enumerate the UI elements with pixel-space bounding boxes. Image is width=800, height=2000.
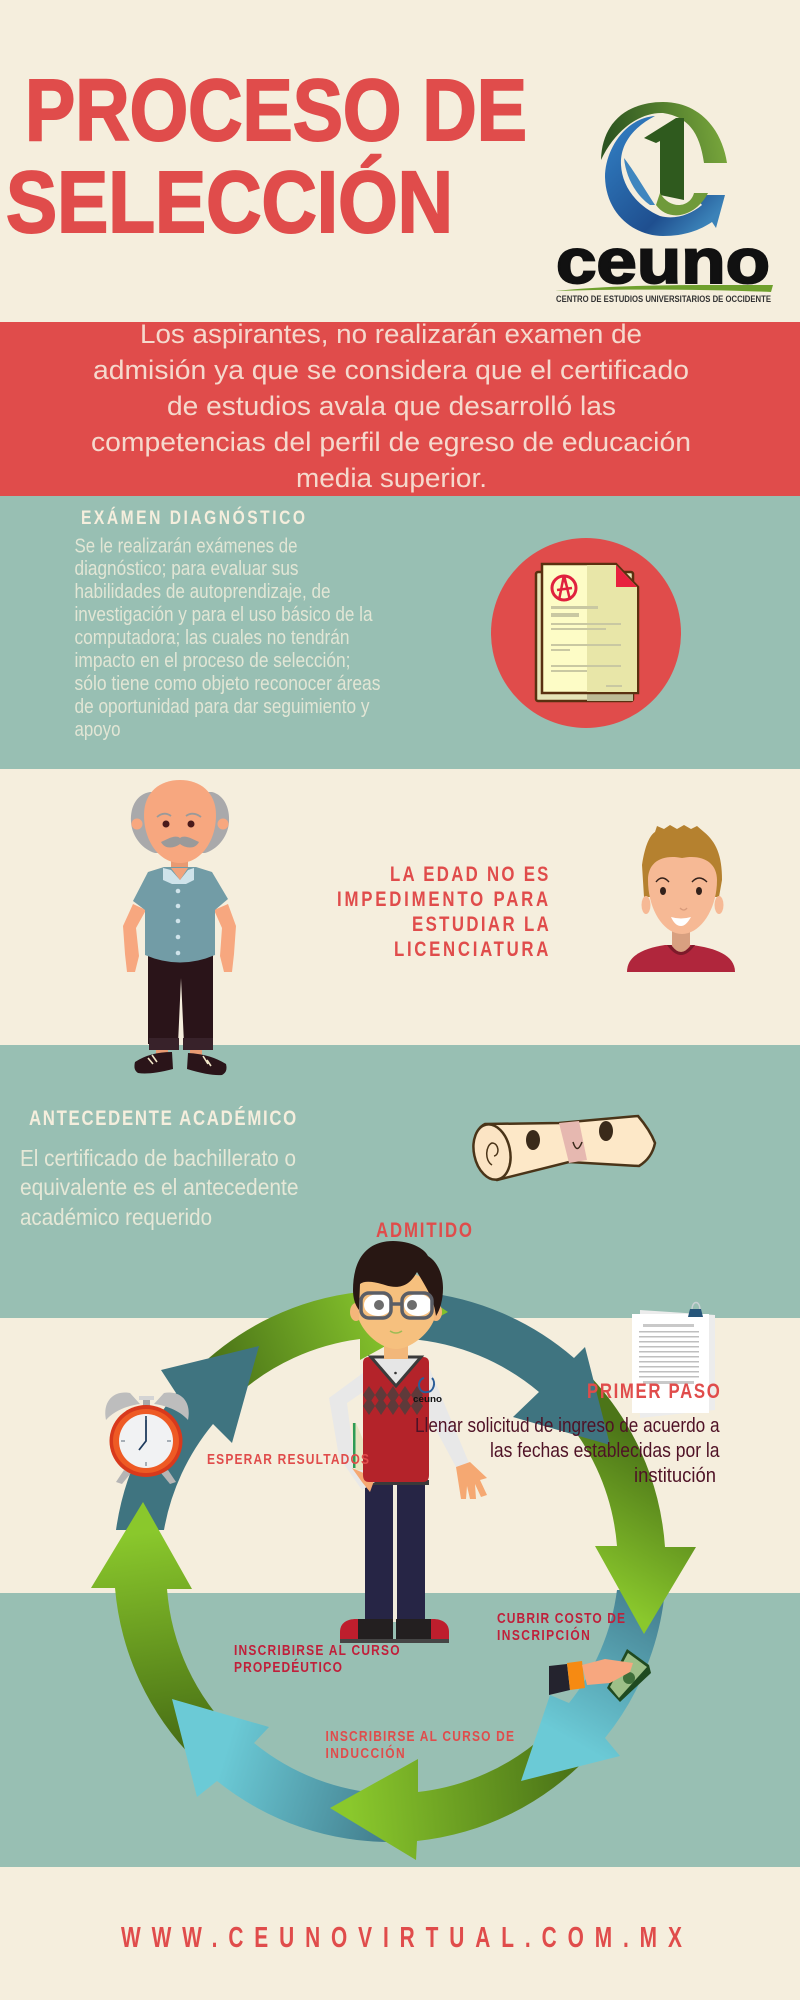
arrow: propaedeutic course [91, 1502, 235, 1760]
panel: intro band [0, 322, 800, 496]
intro text: competencias del perfil de egreso de educación [91, 427, 691, 457]
label: curso de induccion: INSCRIBIRSE AL CURSO DE [326, 1728, 514, 1744]
text: academic description: académico requerido [20, 1204, 212, 1230]
arrow: first step [410, 1292, 610, 1445]
icon: alarm clock [105, 1392, 189, 1484]
icon: diploma scroll [469, 1116, 655, 1183]
intro text [91, 319, 691, 493]
text: age statement: ESTUDIAR LA [412, 913, 549, 937]
text: academic description: El certificado de bachillerato o [20, 1145, 296, 1171]
label: curso de induccion: INDUCCIÓN [326, 1745, 405, 1761]
arrow: after first step [550, 1371, 696, 1634]
icon: ceuno logo: ceuno [556, 227, 770, 297]
text: diagnostic description: computadora; las cuales no tendrán [74, 627, 350, 649]
heading: admitido: ADMITIDO [376, 1219, 472, 1243]
label: esperar resultados: ESPERAR RESULTADOS [207, 1451, 369, 1467]
label: curso propedeutico: INSCRIBIRSE AL CURSO [234, 1642, 400, 1658]
text: diagnostic description [74, 536, 380, 741]
panel: diagnostic exam band [0, 496, 800, 769]
icon: application papers [632, 1302, 715, 1418]
text: diagnostic description: investigación y para el uso básico de la [74, 604, 373, 626]
heading: antecedente academico: ANTECEDENTE ACADÉMICO [29, 1106, 296, 1131]
heading: examen diagnostico: EXÁMEN DIAGNÓSTICO [81, 505, 305, 528]
text: diagnostic description: de oportunidad para dar seguimiento y [74, 696, 370, 718]
intro text: admisión ya que se considera que el certificado [93, 355, 689, 385]
heading: primer paso: PRIMER PASO [587, 1380, 720, 1404]
illustration: admitted student: ceuno [413, 1394, 443, 1404]
text: diagnostic description: impacto en el proceso de selección; [74, 650, 350, 672]
footer website: WWW.CEUNOVIRTUAL.COM.MX [121, 1922, 682, 1954]
arrow: results to admitted [195, 1266, 448, 1396]
intro text: media superior. [296, 463, 487, 493]
label: cubrir costo: CUBRIR COSTO DE [497, 1610, 625, 1626]
intro text: de estudios avala que desarrolló las [167, 391, 616, 421]
text: first step description [415, 1415, 720, 1487]
panel: age band [0, 769, 800, 1045]
label: cubrir costo: INSCRIPCIÓN [497, 1627, 590, 1643]
chart: process cycle arrows [91, 1266, 696, 1860]
text: diagnostic description: diagnóstico; para evaluar sus [74, 558, 298, 580]
text: diagnostic description: sólo tiene como objeto reconocer áreas [74, 673, 380, 695]
arrow: induction course [172, 1699, 395, 1842]
text: academic description: equivalente es el antecedente [20, 1174, 298, 1200]
illustration: young man [627, 825, 735, 972]
text: first step description: institución [634, 1465, 716, 1487]
panel: cycle lower band [0, 1593, 800, 1867]
label: curso de induccion [326, 1728, 514, 1761]
text: age statement: LICENCIATURA [394, 938, 549, 962]
icon: exam documents in circle [491, 538, 681, 728]
text: first step description: Llenar solicitud de ingreso de acuerdo a [415, 1415, 720, 1437]
title: PROCESO DE [25, 62, 527, 159]
text: age statement: LA EDAD NO ES [390, 863, 548, 887]
illustration: admitted student [329, 1241, 487, 1643]
title [6, 62, 527, 251]
arrow: green tip [430, 1300, 448, 1322]
title: SELECCIÓN [6, 154, 453, 251]
icon: ceuno logo [555, 102, 773, 304]
panel: cycle upper band [0, 1318, 800, 1593]
arrow: pay enrollment [521, 1590, 665, 1781]
label: cubrir costo [497, 1610, 625, 1643]
icon: hand with money [549, 1649, 651, 1702]
text: age statement: IMPEDIMENTO PARA [337, 888, 548, 912]
text: diagnostic description: apoyo [74, 719, 120, 741]
text: diagnostic description: Se le realizarán exámenes de [74, 536, 298, 558]
text: first step description: las fechas establecidas por la [490, 1440, 720, 1462]
text: academic description [20, 1145, 298, 1230]
intro text: Los aspirantes, no realizarán examen de [140, 319, 642, 349]
text: age statement [337, 863, 549, 962]
arrow: after payment [330, 1735, 590, 1860]
panel: academic background band [0, 1045, 800, 1318]
icon: ceuno logo: CENTRO DE ESTUDIOS UNIVERSITARIOS DE OCCIDENTE [556, 294, 771, 304]
label: curso propedeutico: PROPEDÉUTICO [234, 1659, 342, 1675]
arrow: wait for results [116, 1346, 259, 1530]
label: curso propedeutico [234, 1642, 400, 1675]
text: diagnostic description: habilidades de autoprendizaje, de [74, 581, 330, 603]
illustration: old man [123, 780, 236, 1075]
